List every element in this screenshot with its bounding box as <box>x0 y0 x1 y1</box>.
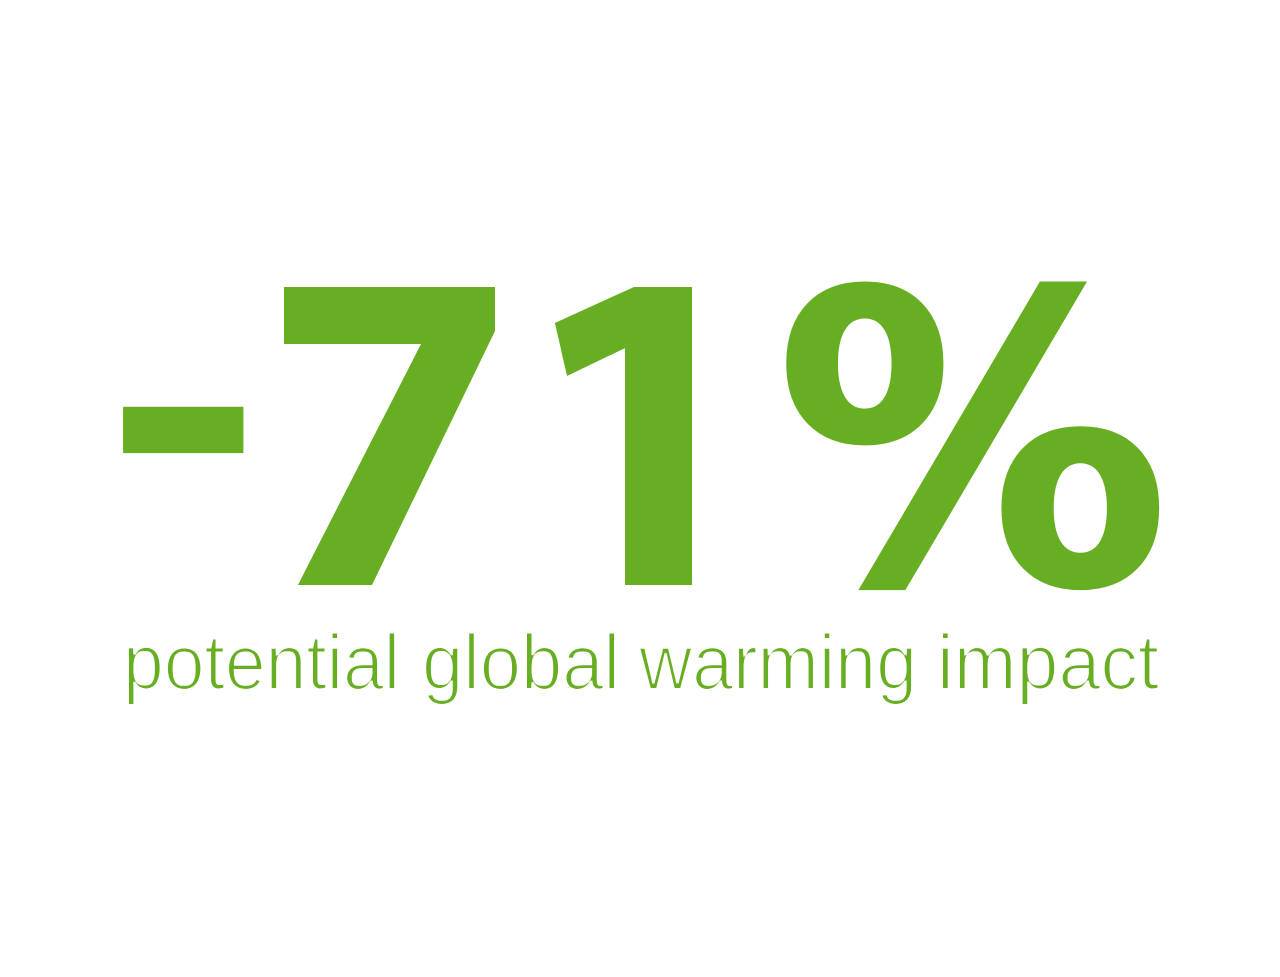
subtitle: impact <box>937 618 1159 706</box>
digit 1: 1 <box>478 199 791 682</box>
digit 7: 7 <box>235 205 530 682</box>
subtitle: potential <box>123 618 400 706</box>
infographic <box>123 282 1160 704</box>
big statistic <box>123 282 1160 590</box>
subtitle <box>123 618 1159 706</box>
percent sign: % <box>776 208 1170 678</box>
subtitle: warming <box>638 618 917 706</box>
subtitle: global <box>422 618 620 706</box>
minus sign: - <box>105 178 262 614</box>
